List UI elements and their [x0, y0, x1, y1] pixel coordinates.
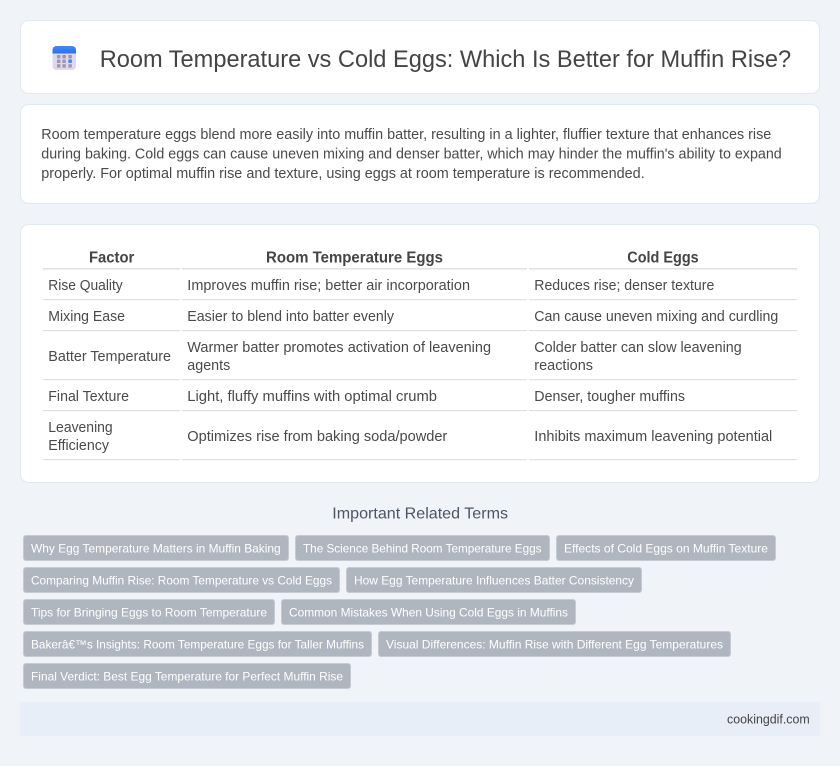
tag — [378, 632, 730, 656]
table header: Room Temperature Eggs — [266, 250, 443, 267]
tag — [24, 568, 340, 592]
text block: description — [41, 127, 782, 182]
tag: Comparing Muffin Rise: Room Temperature vs Cold Eggs — [31, 573, 332, 587]
row: rise quality: Improves muffin rise; better air incorporation — [187, 278, 470, 294]
row: leavening efficiency: Optimizes rise from baking soda/powder — [187, 429, 448, 445]
row: final texture: Light, fluffy muffins with optimal crumb — [187, 389, 437, 405]
row: leavening efficiency — [43, 420, 797, 460]
tag — [282, 600, 576, 624]
heading: important related terms: Important Related Terms — [332, 505, 508, 522]
panel: related term tags — [24, 536, 776, 688]
row: mixing ease: Can cause uneven mixing and curdling — [534, 309, 778, 325]
row: mixing ease: Mixing Ease — [48, 309, 125, 325]
footer source text: cookingdif.com — [727, 711, 810, 726]
tag — [24, 536, 288, 560]
panel: header — [20, 20, 820, 94]
title: Room Temperature vs Cold Eggs: Which Is Better for Muffin Rise? — [100, 46, 791, 73]
row: batter temperature — [43, 340, 797, 380]
tag — [346, 568, 642, 592]
tag — [296, 536, 550, 560]
row: mixing ease: Easier to blend into batter evenly — [187, 309, 395, 325]
text block: description: Room temperature eggs blend more easily into muffin batter, resulting in a lighter, fluffier texture that enhances rise — [41, 127, 771, 143]
row: rise quality — [43, 278, 797, 300]
tag: Why Egg Temperature Matters in Muffin Baking — [31, 541, 281, 555]
row: batter temperature: reactions — [534, 358, 593, 374]
table header: Cold Eggs — [627, 250, 699, 267]
tag: Tips for Bringing Eggs to Room Temperature — [31, 605, 267, 619]
tag: How Egg Temperature Influences Batter Consistency — [354, 573, 634, 587]
row: final texture: Final Texture — [48, 389, 129, 405]
row: rise quality: Reduces rise; denser texture — [534, 278, 714, 294]
row: leavening efficiency: Efficiency — [48, 438, 110, 454]
tag: The Science Behind Room Temperature Eggs — [303, 541, 542, 555]
tag: Visual Differences: Muffin Rise with Different Egg Temperatures — [386, 637, 723, 651]
tag — [24, 600, 274, 624]
tag — [556, 536, 776, 560]
row: batter temperature: agents — [187, 358, 230, 374]
icon: calendar — [52, 46, 76, 70]
row: leavening efficiency: Inhibits maximum leavening potential — [534, 429, 772, 445]
row: final texture: Denser, tougher muffins — [534, 389, 685, 405]
tag: Bakerâ€™s Insights: Room Temperature Eggs for Taller Muffins — [31, 637, 364, 651]
text block: description: during baking. Cold eggs can cause uneven mixing and denser batter, which may hinder the muffin's ability to expand — [41, 146, 782, 162]
panel: description — [20, 104, 820, 204]
tag: Effects of Cold Eggs on Muffin Texture — [564, 541, 768, 555]
footer — [20, 702, 820, 736]
row: batter temperature: Batter Temperature — [48, 349, 171, 365]
row: mixing ease — [43, 309, 797, 331]
tag: Final Verdict: Best Egg Temperature for Perfect Muffin Rise — [31, 669, 343, 683]
tag — [24, 632, 372, 656]
tag: Common Mistakes When Using Cold Eggs in Muffins — [289, 605, 568, 619]
tag — [24, 664, 350, 688]
panel: comparison table — [20, 224, 820, 482]
table header — [43, 250, 797, 270]
row: batter temperature: Warmer batter promotes activation of leavening — [187, 340, 491, 356]
row: final texture — [43, 389, 797, 411]
row: leavening efficiency: Leavening — [48, 420, 113, 436]
row: rise quality: Rise Quality — [48, 278, 123, 294]
row: batter temperature: Colder batter can slow leavening — [534, 340, 742, 356]
text block: description: properly. For optimal muffin rise and texture, using eggs at room temperature is recommended. — [41, 166, 645, 182]
table header: Factor — [89, 250, 134, 267]
